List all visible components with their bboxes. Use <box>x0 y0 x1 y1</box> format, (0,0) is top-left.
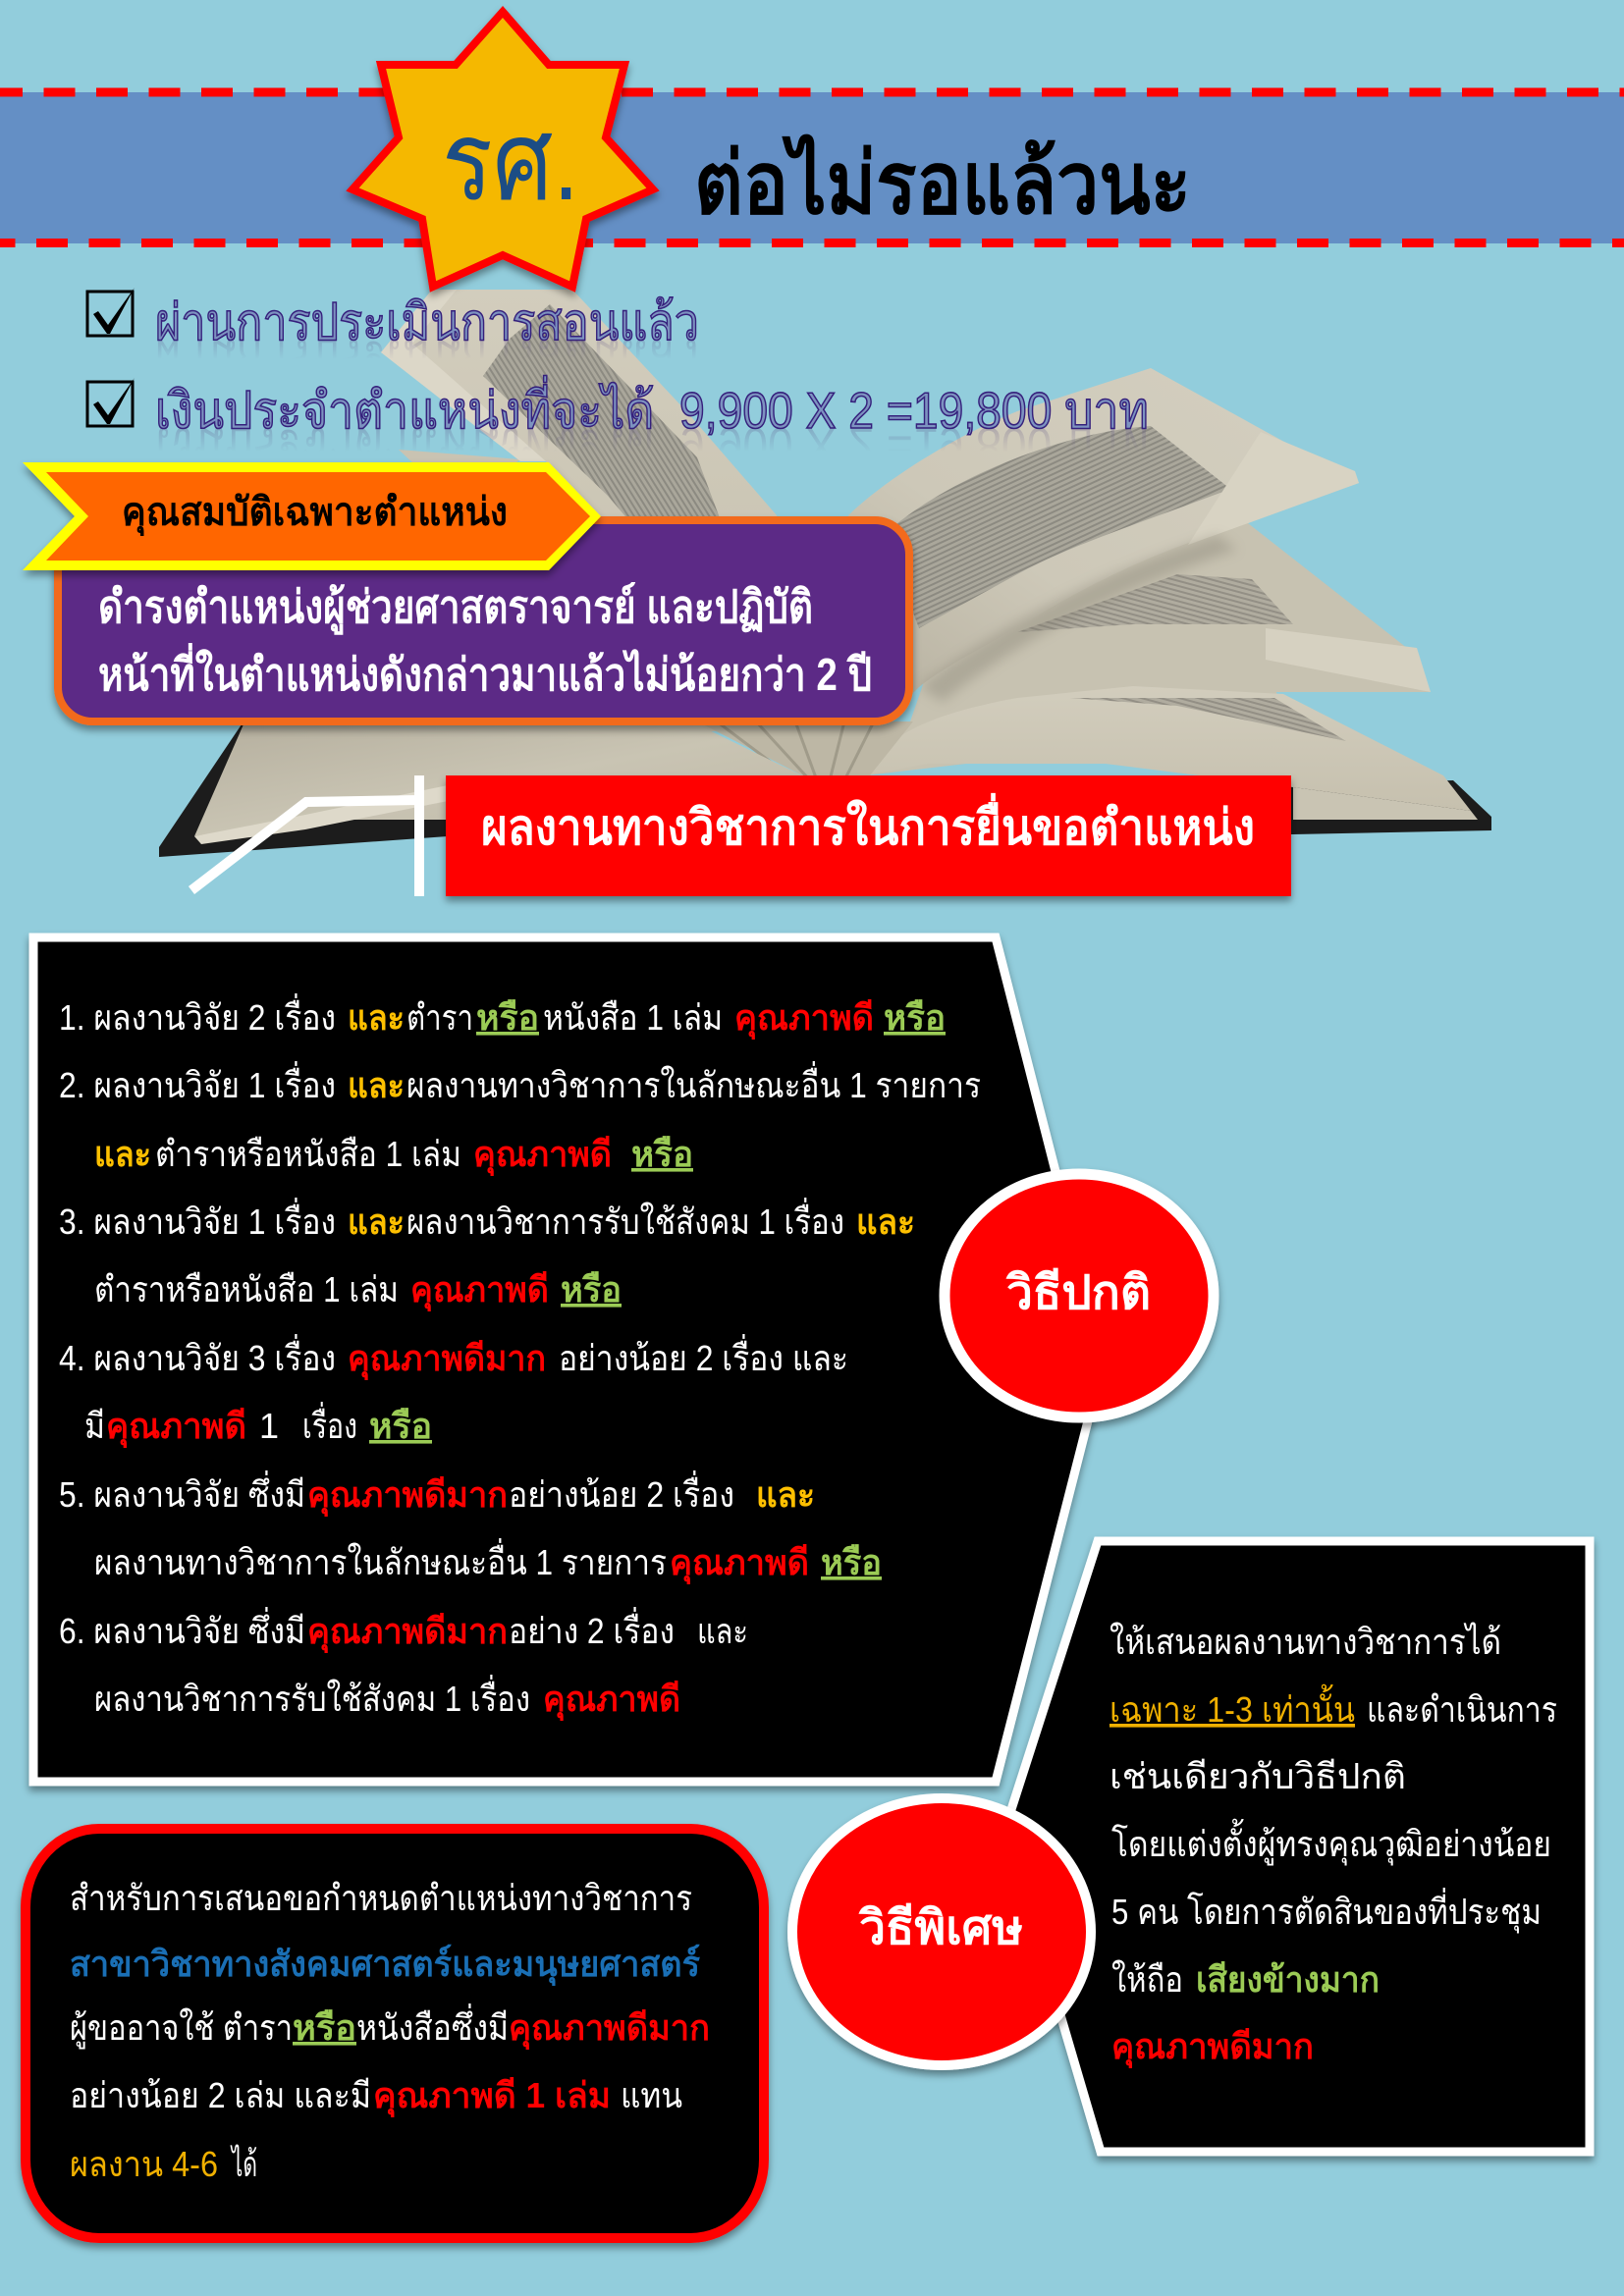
criteria 1: ตำรา <box>406 997 473 1038</box>
ribbon: qualification heading <box>23 462 601 570</box>
connector lines <box>191 775 419 896</box>
special method text: เสียงข้างมาก <box>1196 1959 1380 2000</box>
checklist item 2: เงินประจำตำแหน่งที่จะได้ 9,900 X 2 =19,800 บาท <box>155 375 1149 440</box>
special method text: โดยแต่งตั้งผู้ทรงคุณวุฒิอย่างน้อย <box>1111 1818 1551 1866</box>
second right page <box>866 523 1431 775</box>
criteria 6: และ <box>697 1611 748 1651</box>
criteria 4: หรือ <box>369 1406 432 1446</box>
criteria 2 <box>59 1061 981 1177</box>
criteria 6: คุณภาพดีมาก <box>307 1611 508 1654</box>
special method text: 5 คน โดยการตัดสินของที่ประชุม <box>1111 1888 1542 1934</box>
open book illustration <box>159 290 1491 857</box>
checklist item 1 <box>87 288 699 385</box>
checklist item 2: เงินประจำตำแหน่งที่จะได้ 9,900 X 2 =19,800 บาท <box>155 416 1149 481</box>
criteria 3: ผลงานวิชาการรับใช้สังคม 1 เรื่อง <box>406 1198 844 1242</box>
note line 2: สาขาวิชาทางสังคมศาสตร์และมนุษยศาสตร์ <box>70 1944 701 1987</box>
criteria 4: มี <box>84 1406 105 1446</box>
special method text: และดำเนินการ <box>1367 1689 1557 1730</box>
criteria 2: 2. ผลงานวิจัย 1 เรื่อง <box>59 1061 336 1105</box>
criteria 6: อย่าง 2 เรื่อง <box>509 1607 675 1651</box>
special method text <box>1110 1622 1557 2069</box>
criteria 4: อย่างน้อย 2 เรื่อง และ <box>559 1334 848 1378</box>
criteria 1: 1. ผลงานวิจัย 2 เรื่อง <box>59 993 336 1038</box>
left rising page <box>381 290 820 731</box>
star badge <box>352 12 653 287</box>
criteria 4: คุณภาพดี <box>106 1406 246 1449</box>
ribbon: qualification heading: คุณสมบัติเฉพาะตำแหน่ง <box>122 491 508 537</box>
criteria 5: คุณภาพดี <box>670 1542 809 1585</box>
shadow under upper page <box>919 535 1237 702</box>
criteria 4 <box>59 1334 848 1449</box>
criteria 2: หรือ <box>631 1134 693 1174</box>
note line 3: ผู้ขออาจใช้ ตำรา <box>70 2007 293 2050</box>
criteria 1: หนังสือ 1 เล่ม <box>543 997 723 1038</box>
badge: special method <box>792 1798 1091 2065</box>
header band <box>0 92 1624 243</box>
note line 5: ได้ <box>230 2144 257 2184</box>
special method text: เช่นเดียวกับวิธีปกติ <box>1110 1756 1406 1796</box>
note line 5: ผลงาน 4-6 <box>70 2144 218 2184</box>
note line 4 <box>70 2075 682 2118</box>
academic works heading: ผลงานทางวิชาการในการยื่นขอตำแหน่ง <box>481 793 1255 855</box>
criteria 6: คุณภาพดี <box>543 1679 680 1722</box>
checklist item 1: ผ่านการประเมินการสอนแล้ว <box>155 328 699 385</box>
criteria 3 <box>59 1198 915 1312</box>
criteria 2: และ <box>348 1065 405 1105</box>
criteria 5: ผลงานทางวิชาการในลักษณะอื่น 1 รายการ <box>94 1538 667 1582</box>
qualification line 1: ดำรงตำแหน่งผู้ช่วยศาสตราจารย์ และปฏิบัติ <box>98 581 813 635</box>
note line 3: หนังสือซึ่งมี <box>356 2003 509 2048</box>
special method text: เฉพาะ 1-3 เท่านั้น <box>1110 1683 1355 1730</box>
star label: รศ. <box>442 100 579 223</box>
criteria 2: ตำราหรือหนังสือ 1 เล่ม <box>155 1134 461 1174</box>
badge: normal method <box>945 1174 1214 1417</box>
criteria 4: 1 <box>259 1406 279 1446</box>
criteria 5: 5. ผลงานวิจัย ซึ่งมี <box>59 1470 305 1515</box>
criteria 5: และ <box>756 1474 815 1515</box>
badge: special method: วิธีพิเศษ <box>858 1902 1023 1954</box>
criteria 5: อย่างน้อย 2 เรื่อง <box>509 1470 734 1515</box>
special method text: คุณภาพดีมาก <box>1111 2026 1314 2069</box>
panel: special method <box>1005 1541 1590 2152</box>
criteria 3: หรือ <box>561 1269 622 1309</box>
note line 4: แทน <box>621 2075 682 2115</box>
criteria 1: คุณภาพดี <box>734 997 874 1041</box>
criteria 3: และ <box>348 1201 405 1242</box>
note line 1: สำหรับการเสนอขอกำหนดตำแหน่งทางวิชาการ <box>70 1878 692 1918</box>
criteria 1 <box>59 993 946 1041</box>
upper right page <box>848 368 1359 721</box>
criteria 6 <box>59 1607 748 1722</box>
note line 3 <box>70 2003 710 2051</box>
criteria 5: คุณภาพดีมาก <box>307 1474 508 1518</box>
criteria 5: หรือ <box>821 1542 882 1582</box>
criteria 4: 4. ผลงานวิจัย 3 เรื่อง <box>59 1334 336 1378</box>
criteria 2: และ <box>94 1134 151 1174</box>
panel: qualification text box <box>58 520 909 721</box>
academic works heading <box>446 775 1291 896</box>
checklist item 1: ผ่านการประเมินการสอนแล้ว <box>155 294 699 351</box>
note line 3: หรือ <box>293 2007 356 2048</box>
criteria 3: และ <box>856 1201 915 1242</box>
panel: social sciences note <box>26 1829 764 2238</box>
badge: normal method: วิธีปกติ <box>1005 1267 1151 1319</box>
criteria 5 <box>59 1470 882 1585</box>
note line 4: อย่างน้อย 2 เล่ม และมี <box>70 2075 371 2115</box>
special method text: ให้ถือ <box>1111 1959 1183 2000</box>
criteria 1: และ <box>348 997 405 1038</box>
criteria 4: เรื่อง <box>302 1402 357 1446</box>
note line 3: คุณภาพดีมาก <box>509 2007 710 2051</box>
criteria 3: 3. ผลงานวิจัย 1 เรื่อง <box>59 1198 336 1242</box>
panel: normal method <box>33 937 1104 1782</box>
criteria 2: คุณภาพดี <box>473 1134 612 1177</box>
qualification line 2: หน้าที่ในตำแหน่งดังกล่าวมาแล้วไม่น้อยกว่า 2 ปี <box>98 643 872 700</box>
criteria 1: หรือ <box>476 997 539 1038</box>
small back page <box>399 450 520 481</box>
criteria 1: หรือ <box>884 997 946 1038</box>
centre fan of pages <box>697 721 913 780</box>
headline: ต่อไม่รอแล้วนะ <box>694 134 1191 232</box>
criteria 6: ผลงานวิชาการรับใช้สังคม 1 เรื่อง <box>94 1675 530 1719</box>
lower right page <box>866 686 1471 811</box>
criteria 2: ผลงานทางวิชาการในลักษณะอื่น 1 รายการ <box>406 1061 981 1105</box>
checklist item 2 <box>87 375 1149 481</box>
criteria 3: ตำราหรือหนังสือ 1 เล่ม <box>94 1269 399 1309</box>
criteria 3: คุณภาพดี <box>410 1269 549 1312</box>
book cover <box>159 721 1491 857</box>
right page edge block <box>1293 787 1478 820</box>
lower left page <box>194 724 812 836</box>
criteria 4: คุณภาพดีมาก <box>348 1338 546 1381</box>
special method text: ให้เสนอผลงานทางวิชาการได้ <box>1110 1622 1501 1662</box>
note line 4: คุณภาพดี 1 เล่ม <box>373 2075 611 2118</box>
criteria 6: 6. ผลงานวิจัย ซึ่งมี <box>59 1607 305 1651</box>
